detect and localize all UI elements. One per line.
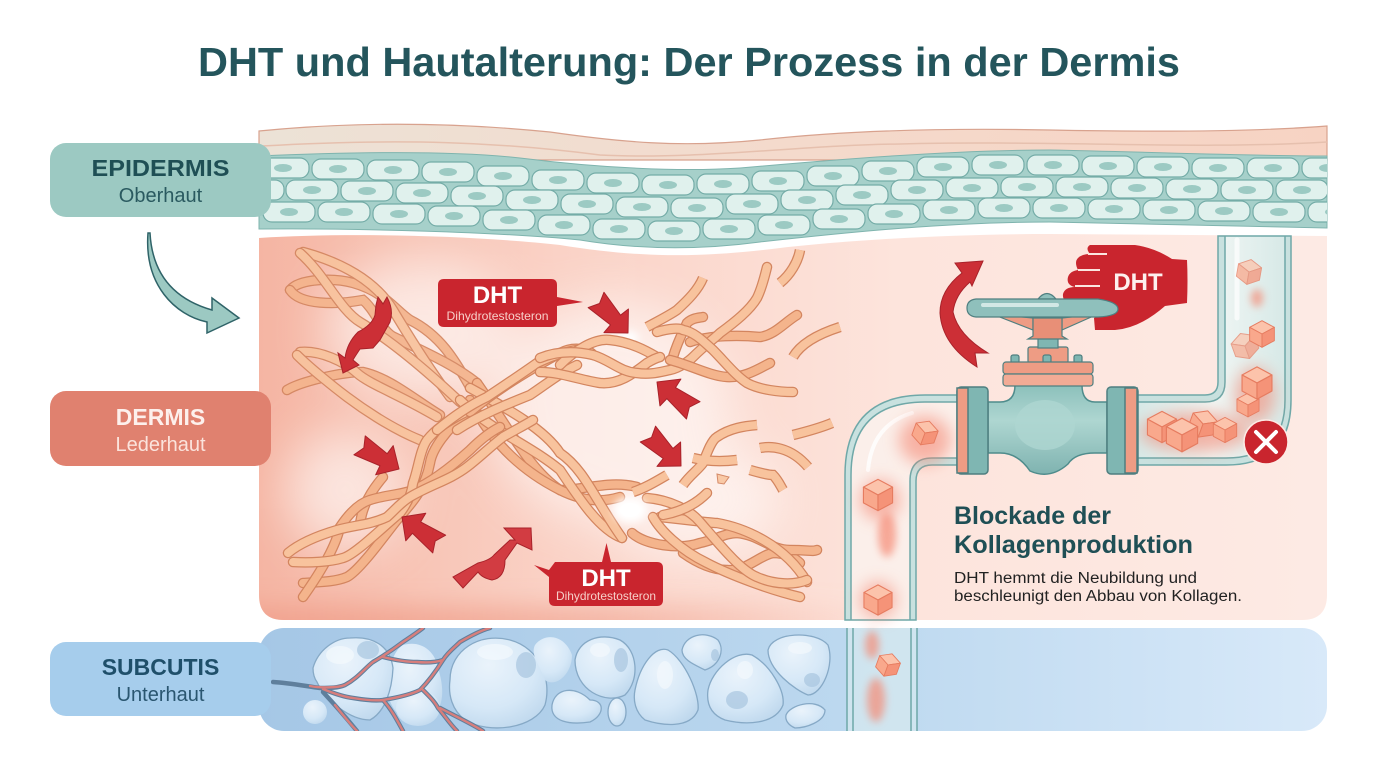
pipe in subcutis [847,628,917,731]
label: epidermis [50,143,271,217]
upper left bundles [287,252,477,440]
epidermis layer [232,124,1360,248]
wavy arrow upper [338,297,391,373]
DHT label lower [534,543,663,606]
DHT label lower: DHT [581,565,631,592]
right flange [1107,387,1138,474]
tear highlights [613,331,647,523]
label: epidermis: Oberhaut [119,185,203,207]
title: DHT und Hautalterung: Der Prozess in der Dermis [198,39,1180,85]
subcutis panel [259,628,1327,731]
DHT label upper: Dihydrotestosteron [446,309,548,323]
pipe [845,236,1291,731]
DHT hand [1063,245,1188,330]
blockade text: Kollagenproduktion [954,531,1193,559]
lower right bundle [460,383,817,597]
valve [957,294,1138,474]
label: epidermis: EPIDERMIS [92,155,230,181]
DHT label lower: Dihydrotestosteron [556,589,656,603]
fat highlights and spots [326,641,820,709]
label: subcutis [50,642,271,716]
label: dermis: DERMIS [116,404,205,430]
blockade text [954,502,1242,605]
wheel [967,294,1118,339]
blockade text: beschleunigt den Abbau von Kollagen. [954,588,1242,605]
wavy arrow lower [453,528,532,588]
left flange [957,387,988,474]
blockade text: DHT hemmt die Neubildung und [954,570,1197,587]
broken fragments [633,250,840,492]
DHT hand: DHT [1113,269,1163,296]
valve body [988,385,1107,474]
collagen cubes [863,258,1274,680]
red attack arrows [338,288,704,588]
label: subcutis: Unterhaut [117,684,205,706]
dermis panel [230,234,1327,646]
rotation arrow [940,261,988,367]
collagen streaks [865,289,1263,722]
DHT label upper: DHT [473,282,522,309]
label: subcutis: SUBCUTIS [102,654,219,680]
blood vessels [273,628,490,731]
fat cells [303,635,830,728]
collagen glow [860,367,1275,618]
label: dermis [50,391,271,466]
blockade text: Blockade der [954,502,1111,530]
collagen fibers [287,250,840,597]
bonnet [1003,338,1093,386]
blocked icon [1244,420,1288,464]
DHT label upper [438,279,583,327]
label: dermis: Lederhaut [115,434,206,456]
flow arrow [148,233,239,333]
main diagonal bundle [288,267,797,597]
